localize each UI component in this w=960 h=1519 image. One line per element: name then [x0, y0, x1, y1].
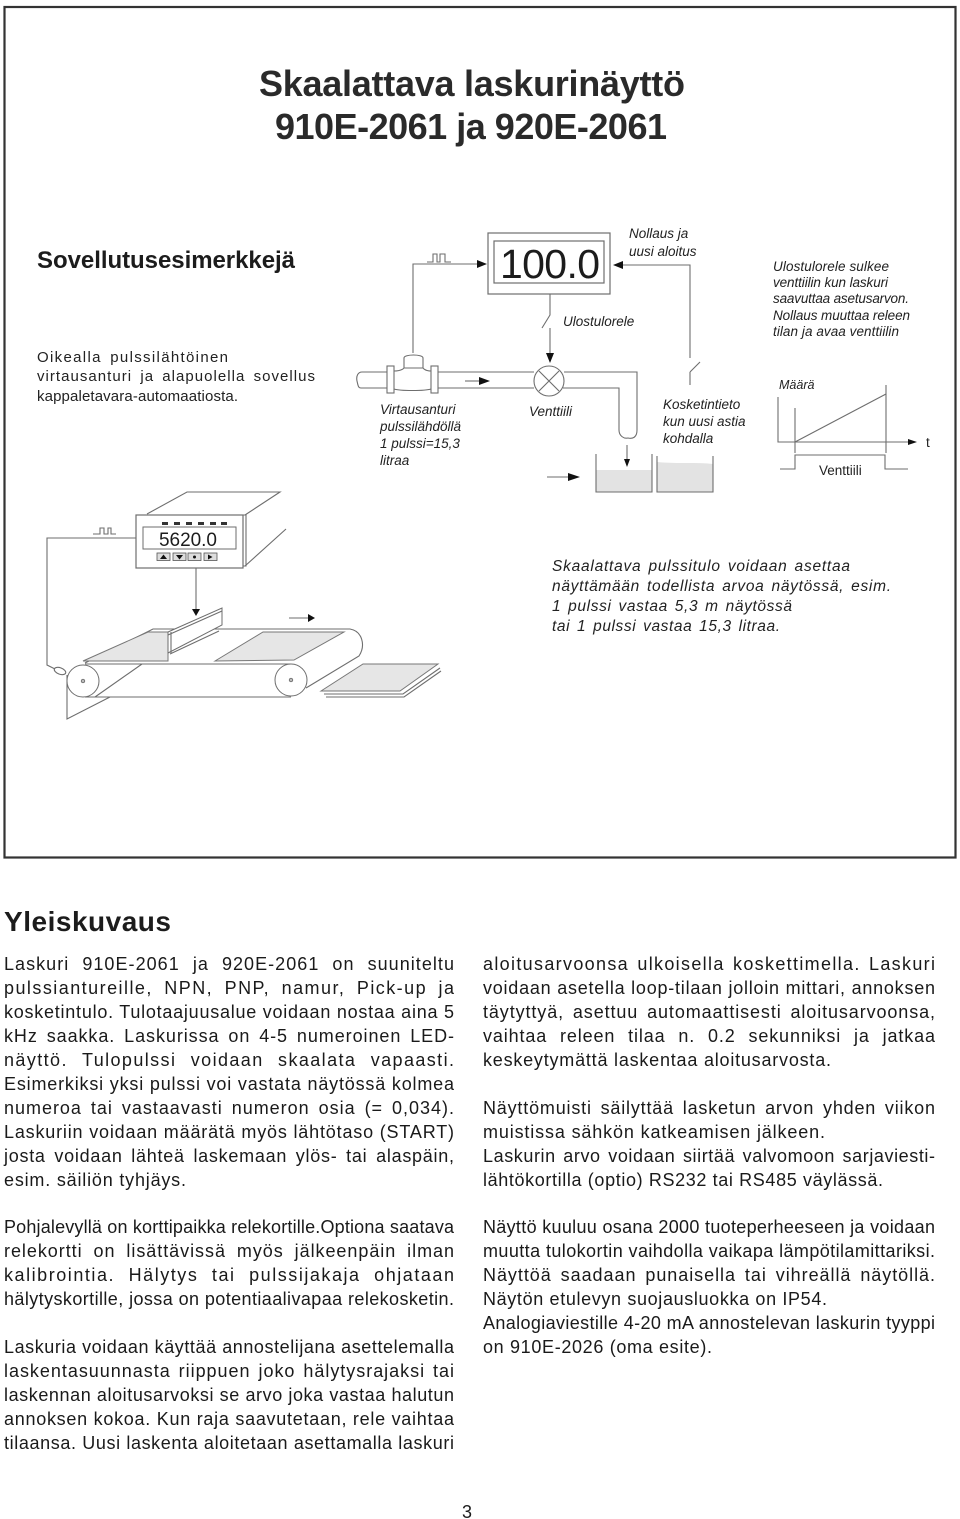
title: 910E-2061 ja 920E-2061 — [275, 106, 667, 147]
text block: right column: Näytön etulevyn suojausluokka on IP54. — [483, 1289, 827, 1309]
text block: left column: Laskuriin voidaan määrätä myös lähtötaso (START) — [4, 1122, 454, 1142]
text block: right column: Näyttö kuuluu osana 2000 tuoteperheeseen ja voidaan — [483, 1217, 935, 1237]
text block: right column: lähtökortilla (optio) RS232 tai RS485 väylässä. — [483, 1170, 883, 1190]
text block: right column: Analogiaviestille 4-20 mA annostelevan laskurin tyyppi — [483, 1313, 935, 1333]
text block: right column: keskeytymättä laskentaa aloitusarvosta. — [483, 1050, 831, 1070]
label: flow sensor — [379, 402, 462, 468]
title — [259, 63, 685, 147]
label: flow sensor: Virtausanturi — [380, 402, 457, 417]
label: reset and restart — [629, 226, 697, 259]
text block: left column: Pohjalevyllä on korttipaikka relekortille.Optiona saatava — [4, 1217, 455, 1237]
text block: right column: Näyttöä saadaan punaisella tai vihreällä näytöllä. — [483, 1265, 935, 1285]
chart: quantity over time — [778, 378, 930, 478]
label: time axis: t — [926, 435, 930, 450]
text block: right column: aloitusarvoonsa ulkoisella koskettimella. Laskuri — [483, 954, 935, 974]
arrow: filling — [624, 445, 630, 467]
label: quantity: Määrä — [779, 378, 814, 392]
arrow: container movement — [547, 473, 580, 481]
title: Skaalattava laskurinäyttö — [259, 63, 685, 104]
icon: valve — [534, 366, 564, 396]
text block: right column: täytyttyä, asettuu automaattisesti aloitusarvoonsa, — [483, 1002, 935, 1022]
text block: left column: josta voidaan lähteä laskemaan ylös- tai alaspäin, — [3, 1146, 454, 1166]
text block: intro: virtausanturi ja alapuolella sovellus — [37, 368, 315, 385]
text block: intro — [37, 349, 315, 405]
text block: left column: Laskuri 910E-2061 ja 920E-2061 on suuniteltu — [4, 954, 454, 974]
text block: left column: kHz saakka. Laskurissa on 4-5 numeroinen LED- — [4, 1026, 454, 1046]
text block: relay description: saavuttaa asetusarvon. — [773, 291, 909, 306]
text block: left column: kosketintulo. Tulotaajuusalue voidaan nostaa aina 5 — [4, 1002, 454, 1022]
flow diagram: pulse signal line — [413, 254, 487, 353]
text block: intro: Oikealla pulssilähtöinen — [37, 349, 228, 366]
text block: left column: numeroa tai vastaavasti numeron osia (= 0,034). — [4, 1098, 454, 1118]
label: flow sensor: litraa — [380, 453, 410, 468]
text block: scaling note: Skaalattava pulssitulo voidaan asettaa — [552, 558, 850, 575]
text block: left column: hälytyskortille, jossa on potentiaalivapaa relekosketin. — [4, 1289, 454, 1309]
text block: relay description: tilan ja avaa venttiilin — [773, 324, 899, 339]
text block: left column: annoksen kokoa. Kun raja saavutetaan, rele vaihtaa — [4, 1409, 455, 1429]
label: reset and restart: uusi aloitus — [629, 244, 697, 259]
icon: panel meter 5620.0: 5620.0 — [159, 530, 217, 551]
text block: scaling note: tai 1 pulssi vastaa 15,3 litraa. — [552, 618, 780, 635]
text block: right column: Laskurin arvo voidaan siirtää valvomoon sarjaviesti- — [483, 1146, 935, 1166]
label: valve: Venttiili — [529, 404, 573, 419]
panel: applications frame — [4, 7, 956, 858]
arrow: reset input — [613, 261, 700, 385]
text block: scaling note: näyttämään todellista arvoa näytössä, esim. — [552, 578, 891, 595]
heading: overview: Yleiskuvaus — [4, 906, 171, 937]
text block: right column: muistissa sähkön katkeamisen jälkeen. — [483, 1122, 825, 1142]
label: contact signal: Kosketintieto — [663, 397, 741, 412]
arrow: belt direction — [289, 614, 315, 622]
text block: left column: laskentasuunnasta riippuen joko hälytysrajaksi tai — [4, 1361, 454, 1381]
label: flow sensor: 1 pulssi=15,3 — [380, 436, 460, 451]
icon: stacked sheets — [321, 664, 441, 697]
text block: left column: Laskuria voidaan käyttää annostelijana asettelemalla — [4, 1337, 455, 1357]
display: 100.0 counter — [488, 233, 610, 294]
text block: scaling note: 1 pulssi vastaa 5,3 m näytössä — [552, 598, 792, 615]
text block: right column — [483, 954, 936, 1357]
text block: intro: kappaletavara-automaatiosta. — [37, 388, 238, 405]
text block: right column: on 910E-2026 (oma esite). — [483, 1337, 712, 1357]
icon: conveyor belt — [67, 629, 362, 719]
text block: left column: näyttö. Tulopulssi voidaan skaalata vapaasti. — [4, 1050, 454, 1070]
text block: relay description — [773, 259, 910, 339]
text block: scaling note — [552, 558, 891, 635]
text block: relay description: Nollaus muuttaa releen — [773, 308, 910, 323]
text block: left column — [3, 954, 455, 1453]
arrow: meter to gate — [192, 568, 200, 616]
label: relay output: Ulostulorele — [563, 314, 634, 329]
label: contact signal — [663, 397, 746, 446]
text block: left column: pulssiantureille, NPN, PNP, namur, Pick-up ja — [4, 978, 455, 998]
icon: next container — [657, 456, 713, 492]
text block: left column: kalibrointia. Hälytys tai pulssijakaja ohjataan — [4, 1265, 454, 1285]
text block: left column: laskennan aloitusarvoksi se arvo joka vastaa halutun — [4, 1385, 454, 1405]
text block: left column: esim. säiliön tyhjäys. — [4, 1170, 186, 1190]
label: valve timing: Venttiili — [819, 463, 862, 478]
outlet pipe — [563, 372, 637, 438]
text block: relay description: Ulostulorele sulkee — [773, 259, 889, 274]
label: reset and restart: Nollaus ja — [629, 226, 689, 241]
text block: right column: Näyttömuisti säilyttää lasketun arvon yhden viikon — [483, 1098, 935, 1118]
heading: application examples: Sovellutusesimerkkejä — [37, 247, 296, 274]
text block: right column: vaihtaa releen tilaa n. 0.2 sekunniksi ja jatkaa — [483, 1026, 936, 1046]
text block: right column: muutta tulokortin vaihdolla vaikapa lämpötilamittariksi. — [483, 1241, 935, 1261]
text block: right column: voidaan asetella loop-tilaan jolloin mittari, annoksen — [483, 978, 935, 998]
text block: left column: tilaansa. Uusi laskenta aloitetaan asettamalla laskuri — [4, 1433, 454, 1453]
icon: container being filled — [596, 454, 652, 492]
icon: flow sensor and pipe — [357, 355, 534, 393]
text block: left column: Esimerkiksi yksi pulssi voi vastata näytössä kolmea — [4, 1074, 455, 1094]
text block: relay description: venttiilin kun laskuri — [773, 275, 889, 290]
pulse signal wire and sensor — [47, 528, 136, 676]
label: contact signal: kohdalla — [663, 431, 714, 446]
label: contact signal: kun uusi astia — [663, 414, 746, 429]
relay output arrow — [542, 294, 554, 363]
label: flow sensor: pulssilähdöllä — [379, 419, 462, 434]
icon: gate — [168, 608, 222, 654]
display: 100.0 counter: 100.0 — [500, 241, 600, 287]
icon: panel meter 5620.0 — [136, 492, 286, 568]
text block: left column: relekortti on lisättävissä myös jälkeenpäin ilman — [4, 1241, 454, 1261]
